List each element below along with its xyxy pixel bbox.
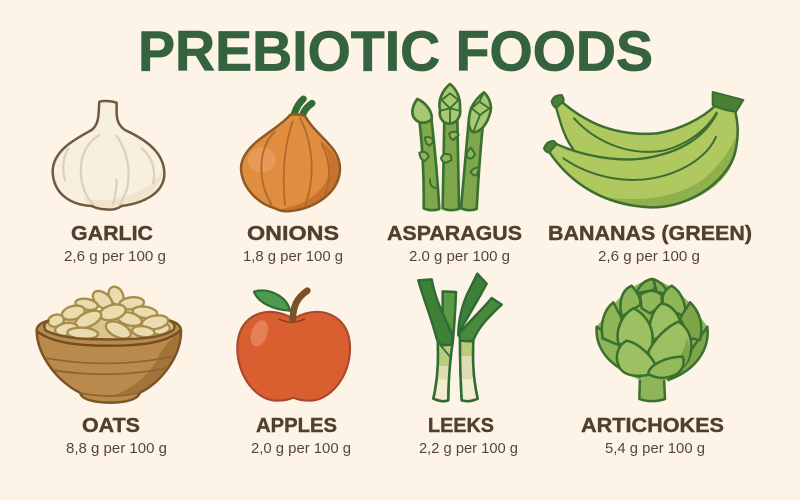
icon: oat bowl	[37, 284, 181, 403]
label: oats: OATS	[82, 414, 140, 437]
label: onions: ONIONS	[247, 222, 339, 245]
label: artichokes: ARTICHOKES	[581, 414, 724, 437]
icon: artichoke	[597, 279, 708, 401]
panel: garlic	[53, 101, 166, 265]
icon: bananas	[544, 92, 743, 207]
title: PREBIOTIC FOODS	[138, 20, 653, 84]
panel: apples	[237, 290, 351, 457]
icon: apple	[237, 290, 350, 401]
label: garlic: GARLIC	[71, 222, 153, 245]
value: onions: 1,8 g per 100 g	[243, 249, 343, 265]
panel: leeks	[418, 274, 518, 457]
bowl body	[37, 321, 181, 403]
panel: oats	[37, 284, 181, 457]
label: leeks: LEEKS	[428, 414, 494, 437]
label: apples: APPLES	[256, 414, 337, 437]
value: asparagus: 2.0 g per 100 g	[409, 249, 510, 265]
icon: garlic	[53, 101, 164, 210]
value: apples: 2,0 g per 100 g	[251, 441, 351, 457]
panel: artichokes	[581, 279, 724, 457]
icon: leeks	[418, 274, 502, 401]
panel: green bananas	[544, 92, 752, 265]
value: bananas: 2,6 g per 100 g	[598, 249, 700, 265]
value: garlic: 2,6 g per 100 g	[64, 249, 166, 265]
value: oats: 8,8 g per 100 g	[66, 441, 167, 457]
icon: asparagus	[412, 84, 491, 210]
value: leeks: 2,2 g per 100 g	[419, 441, 518, 457]
label: asparagus: ASPARAGUS	[387, 222, 522, 245]
panel: onions	[241, 99, 343, 265]
label: bananas: BANANAS (GREEN)	[548, 222, 752, 245]
icon: onion	[241, 99, 340, 211]
value: artichokes: 5,4 g per 100 g	[605, 441, 705, 457]
panel: asparagus	[387, 84, 522, 265]
